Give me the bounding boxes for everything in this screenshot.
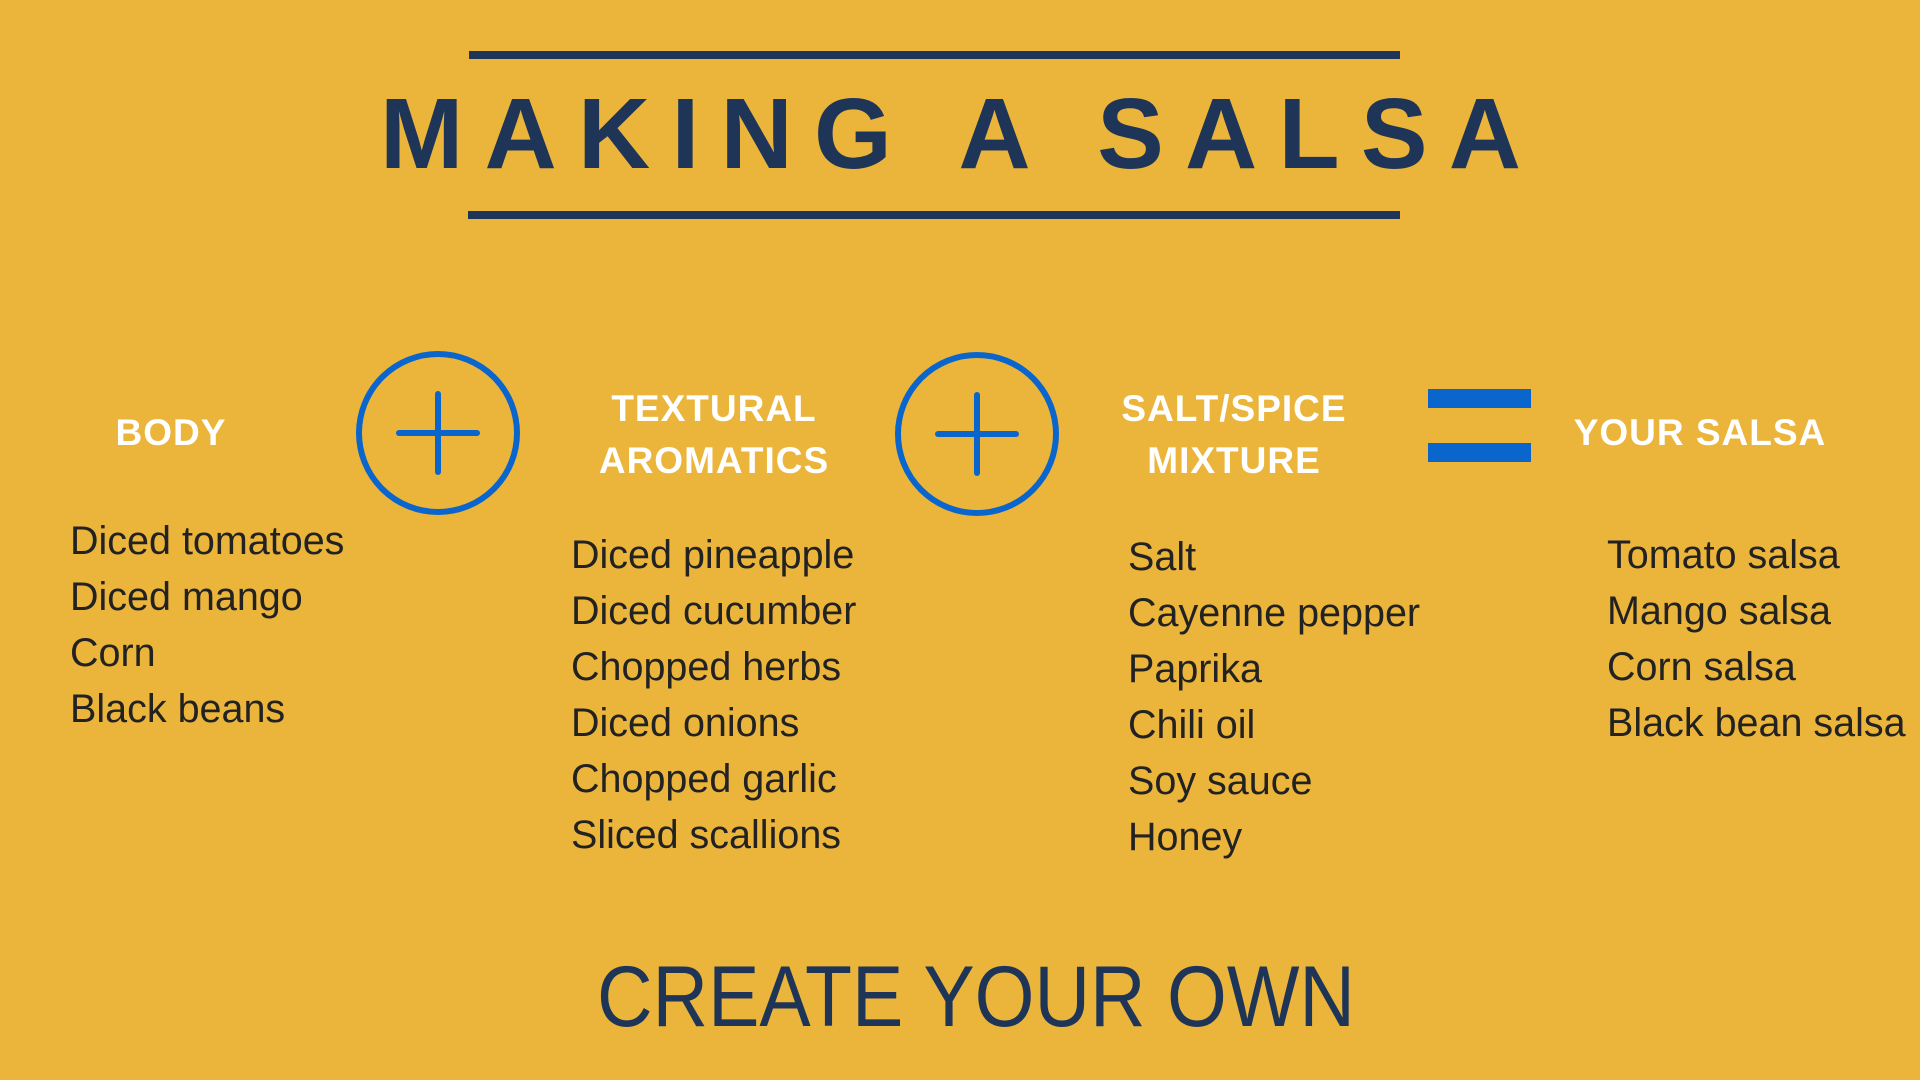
list: salt/spice: Chili oil (1128, 703, 1255, 747)
list: body: Diced tomatoes (70, 519, 344, 563)
icon: equals (1428, 389, 1531, 462)
list: textural aromatics (571, 533, 856, 857)
title (380, 51, 1521, 219)
list: salt/spice (1128, 535, 1420, 859)
title: MAKING A SALSA (380, 78, 1521, 190)
list: salt/spice: Cayenne pepper (1128, 591, 1420, 635)
list: your salsa: Corn salsa (1607, 645, 1796, 689)
list: your salsa: Black bean salsa (1607, 701, 1906, 745)
footer: create your own: CREATE YOUR OWN (597, 949, 1355, 1045)
icon: plus circle 2 (898, 355, 1056, 513)
list: salt/spice: Salt (1128, 535, 1196, 579)
list: salt/spice: Soy sauce (1128, 759, 1312, 803)
heading: body: BODY (116, 412, 226, 453)
list: your salsa: Tomato salsa (1607, 533, 1840, 577)
list: body (70, 519, 344, 731)
heading: salt/spice mixture: MIXTURE (1147, 440, 1321, 481)
list: salt/spice: Honey (1128, 815, 1242, 859)
icon: plus circle 1 (359, 354, 517, 512)
list: textural aromatics: Diced pineapple (571, 533, 854, 577)
list: textural aromatics: Diced onions (571, 701, 799, 745)
list: body: Black beans (70, 687, 285, 731)
list: body: Corn (70, 631, 156, 675)
list: textural aromatics: Sliced scallions (571, 813, 841, 857)
list: salt/spice: Paprika (1128, 647, 1262, 691)
heading: textural aromatics (599, 388, 829, 481)
list: textural aromatics: Chopped garlic (571, 757, 837, 801)
list: textural aromatics: Chopped herbs (571, 645, 841, 689)
list: your salsa: Mango salsa (1607, 589, 1831, 633)
heading: textural aromatics: AROMATICS (599, 440, 829, 481)
heading: your salsa: YOUR SALSA (1574, 412, 1826, 453)
list: your salsa (1607, 533, 1906, 745)
heading: textural aromatics: TEXTURAL (611, 388, 817, 429)
heading: salt/spice mixture (1121, 388, 1347, 481)
list: body: Diced mango (70, 575, 303, 619)
list: textural aromatics: Diced cucumber (571, 589, 856, 633)
heading: salt/spice mixture: SALT/SPICE (1121, 388, 1347, 429)
